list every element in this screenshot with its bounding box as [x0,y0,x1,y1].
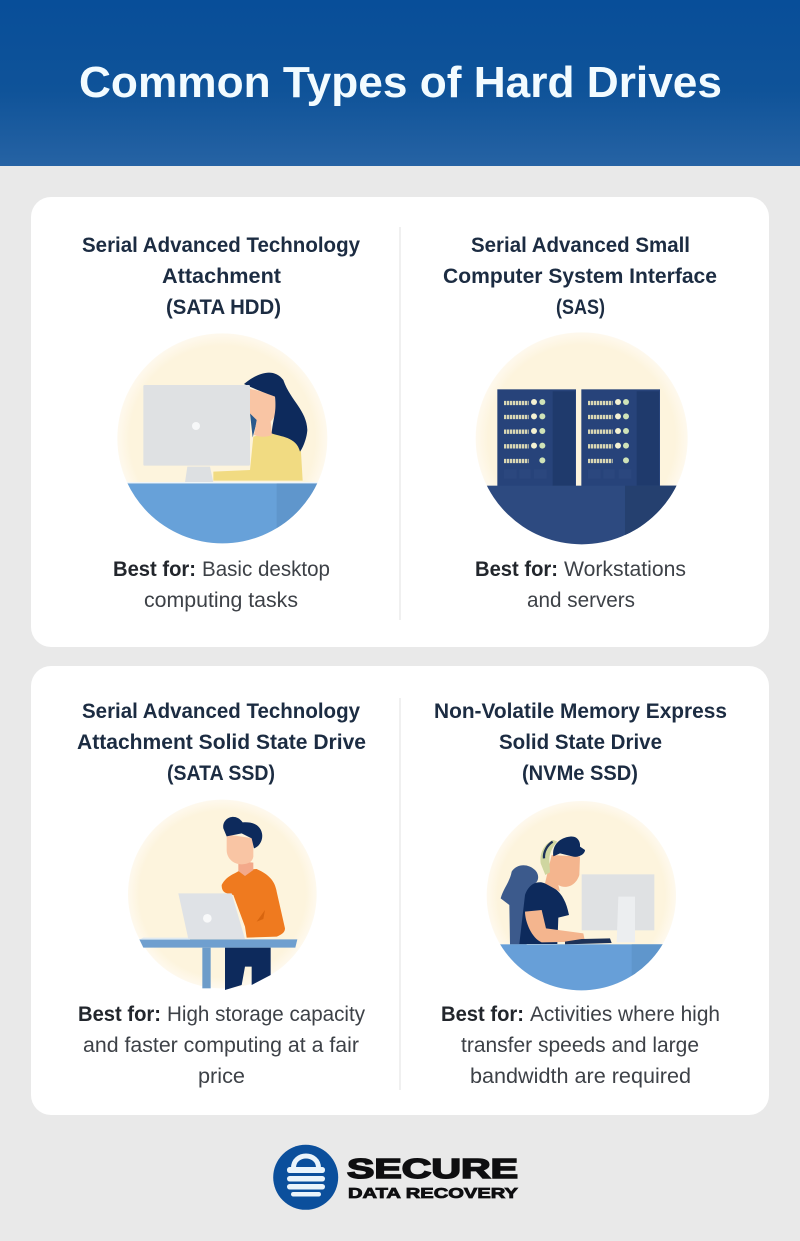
heading: SATA SSD: Serial Advanced Technology [82,700,360,723]
icon: server racks [473,332,693,549]
heading: SATA SSD: (SATA SSD) [167,762,275,785]
heading: NVMe SSD [434,700,727,785]
logo: Secure Data Recovery [273,1145,518,1210]
text: SAS best for: Best for: [475,558,558,581]
text: SATA HDD best for: computing tasks [144,589,298,612]
text: SATA SSD best for [78,1003,365,1088]
heading: SAS: Serial Advanced Small [471,234,690,257]
icon: man with laptop [128,800,317,990]
heading: SATA HDD [82,234,360,319]
panel: bottom drives [31,666,769,1115]
wordmark: SECURE [347,1153,518,1184]
text: SATA HDD best for: Best for: [113,558,196,581]
heading: SATA SSD [77,700,366,785]
icon: woman at desktop computer [113,333,333,550]
text: SATA SSD best for: Best for: [78,1003,161,1026]
heading: SATA HDD: Serial Advanced Technology [82,234,360,257]
text: SATA SSD best for: price [198,1065,245,1088]
wordmark: DATA RECOVERY [348,1185,518,1202]
heading: SAS: Computer System Interface [443,265,717,288]
icon: padlock badge [273,1145,338,1210]
text: SAS best for: Workstations [564,558,686,581]
text: NVMe SSD best for: Activities where high [530,1003,720,1026]
text: SATA SSD best for: and faster computing at a fair [83,1034,359,1057]
heading: SAS [443,234,717,319]
text: SATA HDD best for [113,558,330,612]
title: Common Types of Hard Drives [79,58,722,107]
text: SATA SSD best for: High storage capacity [167,1003,365,1026]
heading: SATA HDD: (SATA HDD) [166,296,281,319]
text: SATA HDD best for: Basic desktop [202,558,330,581]
heading: SATA SSD: Attachment Solid State Drive [77,731,366,754]
text: NVMe SSD best for [441,1003,720,1088]
header banner [0,0,800,166]
text: NVMe SSD best for: bandwidth are required [470,1065,691,1088]
wordmark [347,1153,518,1202]
panel: top drives [31,197,769,647]
heading: NVMe SSD: (NVMe SSD) [522,762,638,785]
text: SAS best for [475,558,686,612]
heading: SAS: (SAS) [556,296,605,319]
heading: SATA HDD: Attachment [162,265,281,288]
heading: NVMe SSD: Solid State Drive [499,731,662,754]
icon: gamer at desktop with headset [483,801,683,994]
heading: NVMe SSD: Non-Volatile Memory Express [434,700,727,723]
text: NVMe SSD best for: Best for: [441,1003,524,1026]
text: SAS best for: and servers [527,589,635,612]
text: NVMe SSD best for: transfer speeds and large [461,1034,699,1057]
